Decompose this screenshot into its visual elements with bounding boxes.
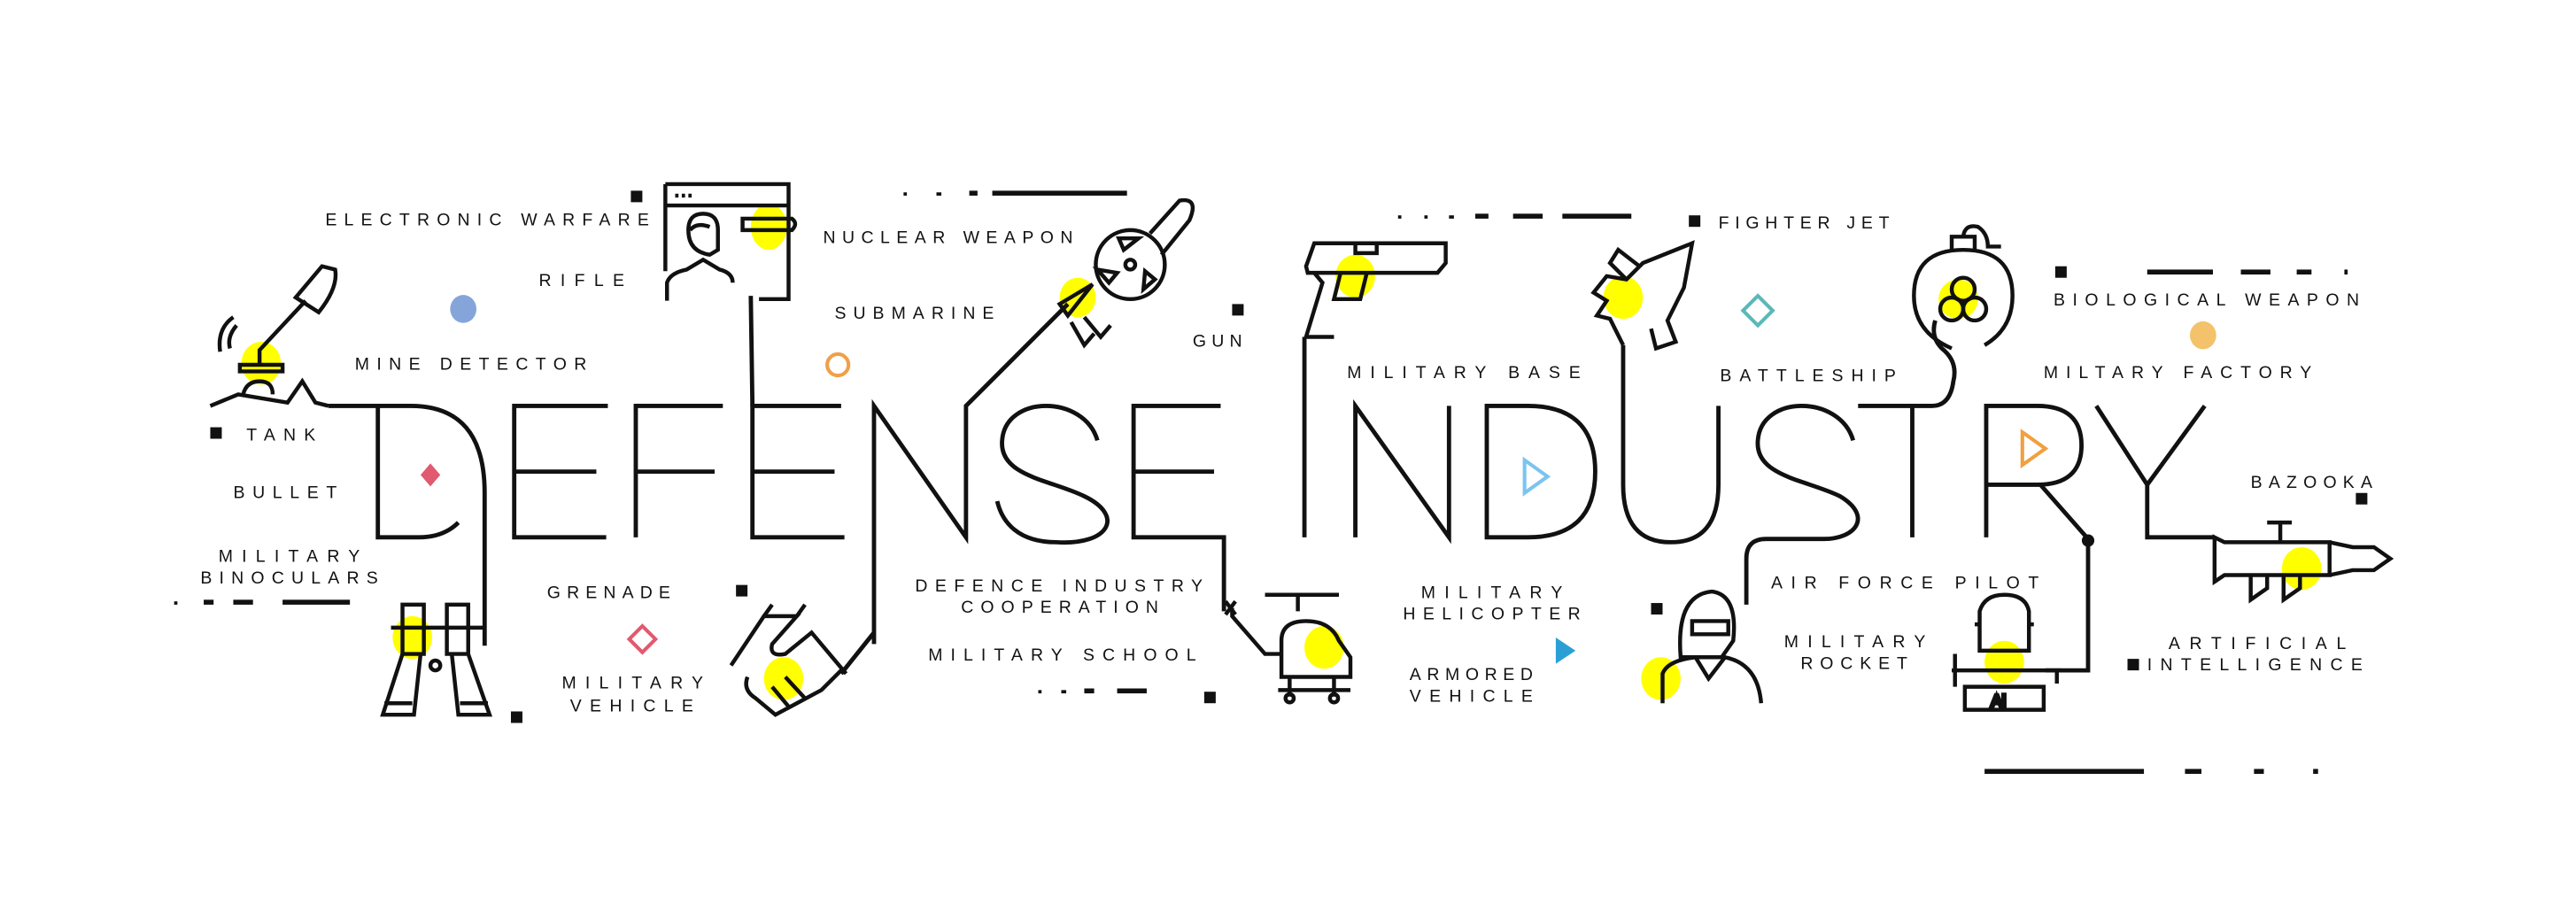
labels: MILITARY	[1421, 583, 1562, 602]
icon: AI robot: Ai	[1992, 692, 2006, 710]
labels: GRENADE	[547, 583, 670, 602]
labels: NUCLEAR WEAPON	[823, 228, 1072, 248]
title: DEFENSE INDUSTRY with connector lines	[329, 296, 2215, 674]
labels: HELICOPTER	[1403, 605, 1581, 624]
U	[1623, 345, 1719, 542]
F	[636, 406, 723, 537]
labels: ROCKET	[1800, 653, 1907, 673]
yellow highlight blobs	[242, 204, 2321, 700]
S	[1746, 406, 1858, 605]
S	[997, 406, 1108, 543]
labels: BATTLESHIP	[1720, 367, 1896, 386]
labels: RIFLE	[539, 271, 624, 290]
R	[1986, 406, 2088, 670]
icon: nuclear missile	[1060, 200, 1193, 345]
labels: ARMORED	[1410, 665, 1533, 684]
N	[1356, 406, 1449, 537]
labels: DEFENCE INDUSTRY	[915, 576, 1203, 596]
icon: biological bomb	[1914, 226, 2013, 348]
labels: VEHICLE	[1410, 686, 1533, 706]
labels: VEHICLE	[570, 696, 693, 715]
labels: COOPERATION	[961, 598, 1158, 617]
I	[1303, 336, 1305, 537]
icon: soldier in frame (electronic warfare)	[665, 184, 795, 301]
labels: ELECTRONIC WARFARE	[325, 210, 649, 229]
E	[753, 406, 845, 537]
icon: tank and mine detector	[210, 267, 336, 406]
Y	[2096, 406, 2215, 537]
labels: MILITARY	[1784, 632, 1925, 652]
dashes and squares	[174, 190, 2367, 774]
labels: BAZOOKA	[2251, 473, 2372, 492]
labels: BIOLOGICAL WEAPON	[2054, 290, 2359, 310]
D	[1487, 406, 1595, 537]
icon: handshake	[731, 605, 846, 715]
labels	[200, 210, 2372, 715]
T	[1858, 321, 1954, 406]
N	[874, 304, 1068, 644]
labels: GUN	[1193, 332, 1242, 352]
labels: SUBMARINE	[834, 304, 994, 323]
labels: MILTARY FACTORY	[2044, 363, 2311, 383]
labels: BULLET	[233, 483, 337, 502]
icon: fighter jet	[1594, 243, 1692, 348]
E	[1133, 406, 1224, 611]
labels: MINE DETECTOR	[355, 355, 586, 375]
E	[514, 406, 607, 537]
icon: gun	[1306, 243, 1446, 336]
labels: INTELLIGENCE	[2147, 655, 2363, 675]
icon: helicopter	[1226, 595, 1350, 702]
labels: FIGHTER JET	[1719, 213, 1890, 233]
labels: MILITARY	[219, 547, 360, 567]
labels: MILITARY	[561, 674, 703, 693]
labels: MILITARY SCHOOL	[928, 645, 1196, 665]
labels: ARTIFICIAL	[2169, 634, 2346, 653]
labels: TANK	[246, 425, 315, 444]
labels: AIR FORCE PILOT	[1771, 573, 2038, 592]
labels: MILITARY BASE	[1347, 363, 1581, 383]
labels: BINOCULARS	[200, 568, 378, 588]
decorative colored shapes	[421, 295, 2216, 664]
icon: binoculars	[383, 605, 490, 715]
D	[329, 406, 484, 645]
icon: air force pilot	[1662, 591, 1761, 703]
icon: AI robot	[1952, 595, 2062, 710]
icon: bazooka	[2215, 522, 2390, 599]
